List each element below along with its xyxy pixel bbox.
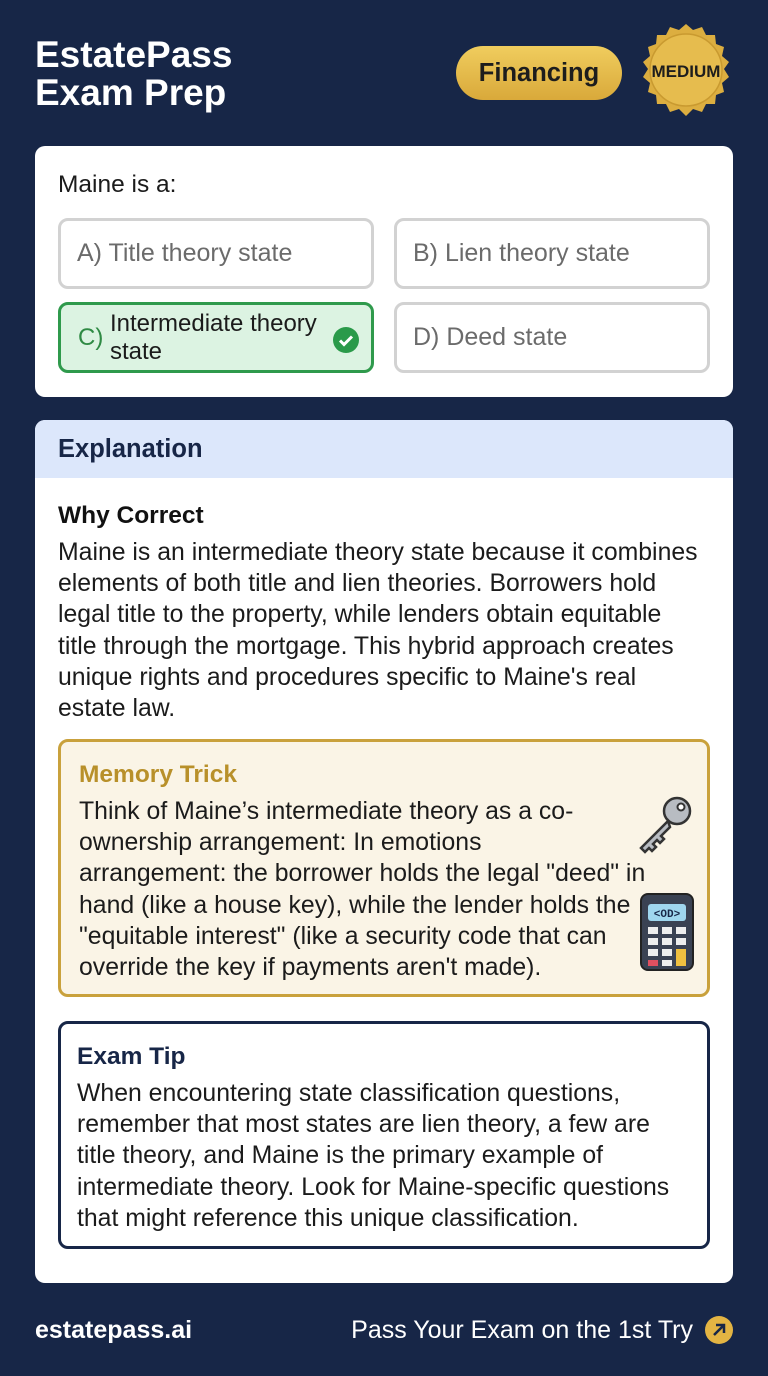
exam tip text: title theory, and Maine is the primary example of <box>77 1142 603 1169</box>
memory trick heading: Memory Trick <box>79 761 237 788</box>
explanation header: Explanation <box>58 435 203 463</box>
option C correct: C) <box>78 324 103 350</box>
exam tip text <box>77 1080 669 1232</box>
title <box>35 34 232 113</box>
option C correct <box>58 302 374 373</box>
option D: D) Deed state <box>413 323 567 351</box>
callout: exam tip <box>58 1021 710 1249</box>
title: EstatePass <box>35 34 232 75</box>
why correct text: elements of both title and lien theories. Borrowers hold <box>58 570 656 597</box>
badge: Financing: Financing <box>479 58 599 86</box>
memory trick text <box>79 798 645 981</box>
memory trick text: arrangement: the borrower holds the legal "deed" in <box>79 860 645 887</box>
memory trick text: hand (like a house key), while the lender holds the <box>79 892 630 919</box>
option C correct: state <box>110 338 162 364</box>
why correct text <box>58 539 698 722</box>
exam tip text: that might reference this unique classification. <box>77 1205 579 1232</box>
option D <box>394 302 710 373</box>
icon: calculator: <OD> <box>654 909 681 921</box>
icon: calculator <box>640 893 694 971</box>
why correct heading: Why Correct <box>58 502 204 529</box>
option C correct: Intermediate theory <box>110 310 317 336</box>
why correct text: estate law. <box>58 695 175 722</box>
icon: arrow circle <box>705 1316 733 1344</box>
memory trick text: Think of Maine’s intermediate theory as a co- <box>79 798 573 825</box>
badge: Medium <box>643 24 729 116</box>
question text: Maine is a: <box>58 171 176 198</box>
exam tip text: When encountering state classification questions, <box>77 1080 620 1107</box>
memory trick text: ownership arrangement: In emotions <box>79 829 481 856</box>
option A: A) Title theory state <box>77 239 292 267</box>
option A <box>58 218 374 289</box>
option B <box>394 218 710 289</box>
icon: key <box>639 796 692 854</box>
badge: Financing <box>456 46 622 100</box>
footer tagline: Pass Your Exam on the 1st Try <box>351 1316 693 1344</box>
badge: Medium: MEDIUM <box>652 62 720 81</box>
exam tip heading: Exam Tip <box>77 1043 185 1070</box>
icon: check <box>333 327 359 353</box>
exam tip text: remember that most states are lien theory, a few are <box>77 1111 650 1138</box>
footer brand: estatepass.ai <box>35 1316 192 1344</box>
why correct text: Maine is an intermediate theory state because it combines <box>58 539 698 566</box>
option B: B) Lien theory state <box>413 239 630 267</box>
panel: explanation <box>35 420 733 1283</box>
memory trick text: override the key if payments aren't made). <box>79 954 541 981</box>
why correct text: legal title to the property, while lenders obtain equitable <box>58 601 661 628</box>
why correct text: unique rights and procedures specific to Maine's real <box>58 664 636 691</box>
exam tip text: intermediate theory. Look for Maine-specific questions <box>77 1174 669 1201</box>
panel: question <box>35 146 733 397</box>
memory trick text: "equitable interest" (like a security code that can <box>79 923 607 950</box>
explanation header <box>35 420 733 478</box>
callout: memory trick <box>58 739 710 997</box>
title: Exam Prep <box>35 72 226 113</box>
why correct text: title through the mortgage. This hybrid approach creates <box>58 633 674 660</box>
